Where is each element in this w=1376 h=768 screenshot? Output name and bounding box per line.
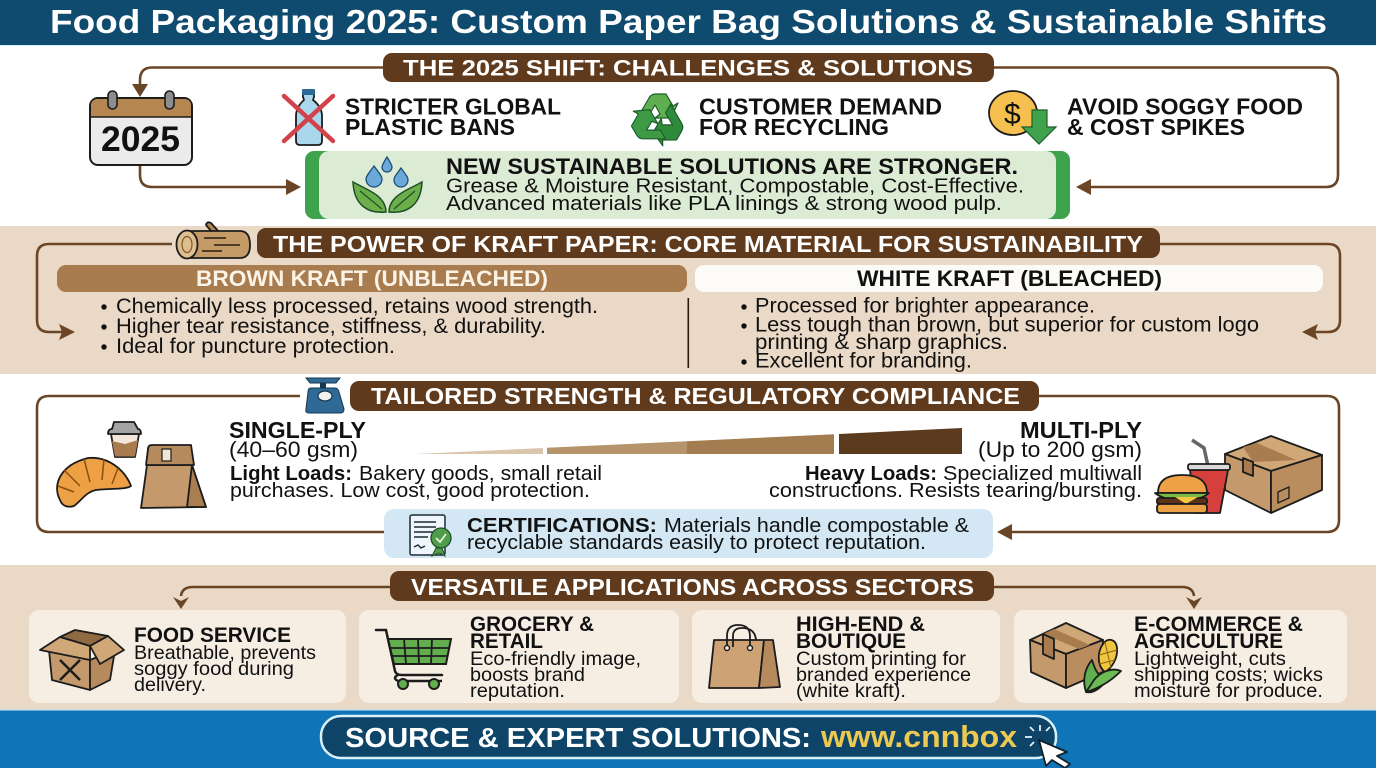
white kraft bullets: printing & sharp graphics. (755, 331, 1008, 354)
arrow: log to brown kraft bullets (37, 244, 172, 340)
icon: box with corn (1030, 623, 1121, 692)
solution text: NEW SUSTAINABLE SOLUTIONS ARE STRONGER. (446, 154, 1018, 179)
challenge: customer demand for recycling (699, 94, 942, 140)
title banner (0, 0, 1376, 46)
challenge: customer demand for recycling: FOR RECYCLING (699, 114, 889, 140)
arrow: calendar to solutions box (140, 165, 301, 195)
brown kraft column (57, 265, 687, 358)
heading: the power of kraft paper: THE POWER OF KRAFT PAPER: CORE MATERIAL FOR SUSTAINABILITY (273, 231, 1143, 257)
solution text (446, 154, 1024, 215)
icon: takeout box with cutlery (40, 630, 124, 690)
icon: croissant (57, 458, 131, 507)
icon: wood log (176, 222, 250, 258)
challenge: avoid soggy food and cost spikes (1067, 94, 1303, 140)
heading: versatile applications: VERSATILE APPLICATIONS ACROSS SECTORS (411, 574, 974, 600)
icon: shopping cart (376, 630, 451, 689)
food service text: soggy food during (134, 658, 294, 680)
multi-ply text: Specialized multiwall (943, 463, 1142, 485)
callout: certifications (384, 509, 993, 558)
multi-ply text: (Up to 200 gsm) (978, 437, 1142, 462)
icon: 2025 calendar: 2025 (101, 120, 180, 159)
high-end and boutique text (796, 613, 971, 702)
chart: paper weight wedge (415, 428, 962, 454)
brown kraft label (57, 265, 687, 292)
panel: versatile applications (0, 565, 1376, 710)
panel: the power of kraft paper (0, 222, 1376, 374)
icon: dollar coin with down arrow: $ (1004, 98, 1021, 131)
brown kraft bullets: Higher tear resistance, stiffness, & durability. (116, 315, 546, 338)
e-commerce and agriculture text: moisture for produce. (1134, 680, 1323, 702)
icon: boutique shopping bag (709, 625, 780, 688)
certification text: recyclable standards easily to protect reputation. (467, 531, 926, 554)
card: high-end and boutique (692, 610, 1000, 703)
heading: the 2025 shift: THE 2025 SHIFT: CHALLENGES & SOLUTIONS (403, 56, 973, 80)
multi-ply text: MULTI-PLY (1020, 417, 1142, 443)
icon: burger (1155, 475, 1209, 513)
arrow: heading to food service (173, 587, 390, 609)
e-commerce and agriculture text: AGRICULTURE (1134, 630, 1283, 653)
food service text (134, 624, 316, 696)
icon: dollar coin with down arrow (989, 91, 1056, 144)
e-commerce and agriculture text (1134, 613, 1323, 702)
single-ply text: Bakery goods, small retail (359, 463, 602, 485)
food service text: Breathable, prevents (134, 642, 316, 664)
grocery and retail text: Eco-friendly image, (470, 648, 641, 670)
single-ply text: (40–60 gsm) (229, 437, 358, 462)
footer banner (0, 709, 1376, 768)
icon: certificate with ribbon (410, 515, 451, 556)
arrow: heading to white kraft bullets (1160, 244, 1340, 340)
challenge: avoid soggy food and cost spikes: AVOID SOGGY FOOD (1067, 94, 1303, 120)
brown kraft label: BROWN KRAFT (UNBLEACHED) (196, 266, 548, 291)
high-end and boutique text: HIGH-END & (796, 613, 925, 636)
grocery and retail text: RETAIL (470, 630, 543, 653)
solution text: Advanced materials like PLA linings & strong wood pulp. (446, 192, 1002, 215)
e-commerce and agriculture text: shipping costs; wicks (1134, 664, 1323, 686)
high-end and boutique text: BOUTIQUE (796, 630, 906, 653)
multi-ply text (769, 417, 1142, 502)
white kraft bullets (741, 294, 1259, 372)
card: grocery and retail (359, 610, 679, 703)
arrow: right frame to certifications (997, 396, 1339, 540)
icon: cardboard box (1225, 436, 1322, 513)
icon: 2025 calendar (90, 91, 192, 165)
challenge: customer demand for recycling: CUSTOMER DEMAND (699, 94, 942, 120)
challenge: stricter global plastic bans: STRICTER GLOBAL (345, 94, 561, 120)
grocery and retail text: GROCERY & (470, 613, 594, 636)
arrow: left frame to certifications (37, 396, 384, 532)
heading: tailored strength: TAILORED STRENGTH & REGULATORY COMPLIANCE (371, 383, 1020, 409)
card: food service (29, 610, 346, 703)
brown kraft bullets: Ideal for puncture protection. (116, 335, 395, 358)
white kraft bullets: Less tough than brown, but superior for custom logo (755, 314, 1259, 336)
high-end and boutique text: Custom printing for (796, 648, 967, 670)
white kraft label (695, 265, 1323, 292)
single-ply text: SINGLE-PLY (229, 417, 366, 443)
white kraft label: WHITE KRAFT (BLEACHED) (857, 266, 1162, 291)
food service text: FOOD SERVICE (134, 624, 291, 647)
e-commerce and agriculture text: E-COMMERCE & (1134, 613, 1303, 636)
icon: weighing scale (306, 378, 344, 413)
challenge: avoid soggy food and cost spikes: & COST SPIKES (1067, 114, 1245, 140)
arrow: heading around to solutions box (994, 68, 1338, 195)
icon: water drops and leaves (353, 157, 422, 212)
arrow: heading to e-commerce (994, 587, 1202, 609)
source call to action: www.cnnbox (820, 719, 1018, 754)
challenge: stricter global plastic bans: PLASTIC BANS (345, 114, 515, 140)
panel: the 2025 shift (0, 46, 1376, 226)
grocery and retail text: reputation. (470, 680, 565, 702)
certification text: Materials handle compostable & (664, 514, 969, 537)
source call to action: SOURCE & EXPERT SOLUTIONS: (345, 722, 811, 753)
source call to action (321, 716, 1056, 758)
arrow: heading to calendar (132, 68, 384, 97)
single-ply text (229, 417, 602, 502)
white kraft column (695, 265, 1323, 372)
icon: recycling arrows (625, 94, 691, 150)
multi-ply text: Heavy Loads: (805, 463, 937, 485)
icon: mouse cursor with click sparkle (1025, 725, 1070, 768)
grocery and retail text (470, 613, 641, 702)
callout: new sustainable solutions (305, 151, 1070, 219)
icon: crossed plastic bottle (284, 89, 333, 145)
multi-ply text: constructions. Resists tearing/bursting. (769, 480, 1142, 502)
title banner: Food Packaging 2025: Custom Paper Bag Solutions & Sustainable Shifts (50, 3, 1327, 40)
white kraft bullets: Excellent for branding. (755, 350, 972, 372)
panel: tailored strength and compliance (0, 374, 1376, 565)
certification text: CERTIFICATIONS: (467, 514, 657, 537)
white kraft bullets: Processed for brighter appearance. (755, 294, 1095, 318)
certification text (467, 514, 969, 554)
e-commerce and agriculture text: Lightweight, cuts (1134, 648, 1286, 670)
single-ply text: Light Loads: (230, 463, 352, 485)
icon: coffee cup (108, 422, 141, 457)
high-end and boutique text: branded experience (796, 664, 971, 686)
brown kraft bullets: Chemically less processed, retains wood strength. (116, 295, 598, 318)
solution text: Grease & Moisture Resistant, Compostable, Cost-Effective. (446, 174, 1024, 198)
brown kraft bullets (101, 295, 598, 358)
single-ply text: purchases. Low cost, good protection. (230, 480, 590, 502)
challenge: stricter global plastic bans (345, 94, 561, 140)
icon: soft drink cup (1188, 440, 1230, 513)
icon: brown paper bag (141, 445, 206, 508)
card: e-commerce and agriculture (1014, 610, 1347, 703)
high-end and boutique text: (white kraft). (796, 680, 906, 702)
grocery and retail text: boosts brand (470, 664, 585, 686)
food service text: delivery. (134, 674, 206, 696)
